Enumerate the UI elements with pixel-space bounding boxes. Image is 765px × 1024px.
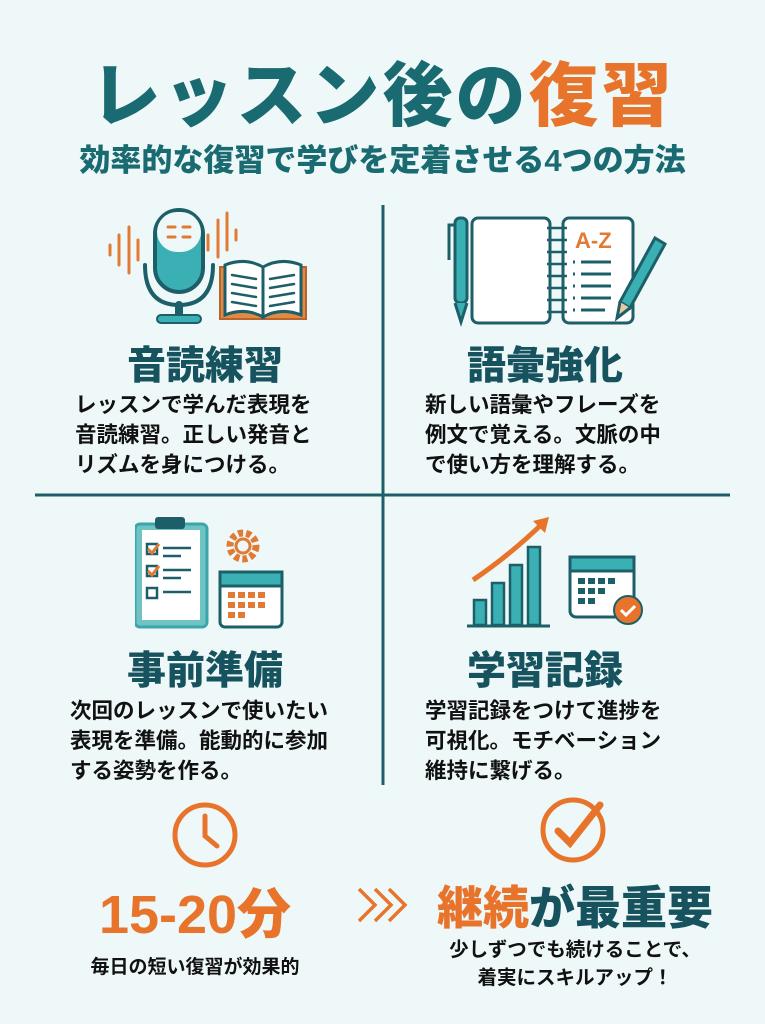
- text: 学習記録: 維持に繋げる。: [425, 759, 576, 783]
- text: 事前準備: [70, 699, 328, 783]
- heading: 事前準備: 事前準備: [127, 650, 283, 693]
- text: 毎日の短い復習: 毎日の短い復習が効果的: [90, 957, 300, 978]
- text: 音読練習: リズムを身につける。: [75, 453, 290, 477]
- icon: notebook and pens: A-Z: [575, 228, 612, 253]
- icon: microphone and book: [108, 208, 307, 324]
- text: 事前準備: する姿勢を作る。: [70, 759, 242, 783]
- callout: 継続が最重要: 継続が最重要: [437, 882, 713, 934]
- subtitle: 効率的な復習で学びを定着させる4つの方法: [79, 143, 686, 178]
- text: 語彙強化: で使い方を理解する。: [425, 453, 640, 477]
- text: 音読練習: 音読練習。正しい発音と: [75, 423, 312, 447]
- text: 学習記録: 学習記録をつけて進捗を: [425, 699, 662, 723]
- text: 語彙強化: 例文で覚える。文脈の中: [425, 423, 661, 447]
- icon: check circle: [540, 798, 606, 862]
- text: 事前準備: 表現を準備。能動的に参加: [70, 729, 328, 753]
- text: 音読練習: [75, 393, 312, 477]
- icon: bar chart and calendar: [467, 517, 643, 628]
- title: レッスン後の復習: [90, 57, 674, 135]
- callout: 15-20分: 15-20分: [99, 885, 291, 945]
- text: 継続 description: 着実にスキルアップ！: [477, 967, 672, 989]
- text: 学習記録: 可視化。モチベーション: [425, 729, 661, 753]
- heading: 音読練習: 音読練習: [127, 345, 283, 388]
- heading: 学習記録: 学習記録: [467, 650, 623, 693]
- text: 学習記録: [425, 699, 662, 783]
- arrow: chevrons: [358, 888, 408, 922]
- text: 語彙強化: [425, 393, 661, 477]
- text: 継続 description: 少しずつでも続けることで、: [449, 939, 701, 961]
- icon: clipboard gear calendar: [135, 517, 284, 628]
- text: 事前準備: 次回のレッスンで使いたい: [70, 699, 328, 723]
- icon: notebook and pens: [448, 216, 667, 327]
- text: 音読練習: レッスンで学んだ表現を: [75, 393, 312, 417]
- text: 継続 description: [449, 939, 701, 989]
- text: 語彙強化: 新しい語彙やフレーズを: [425, 393, 660, 417]
- heading: 語彙強化: 語彙強化: [467, 345, 623, 388]
- icon: clock: [172, 802, 238, 868]
